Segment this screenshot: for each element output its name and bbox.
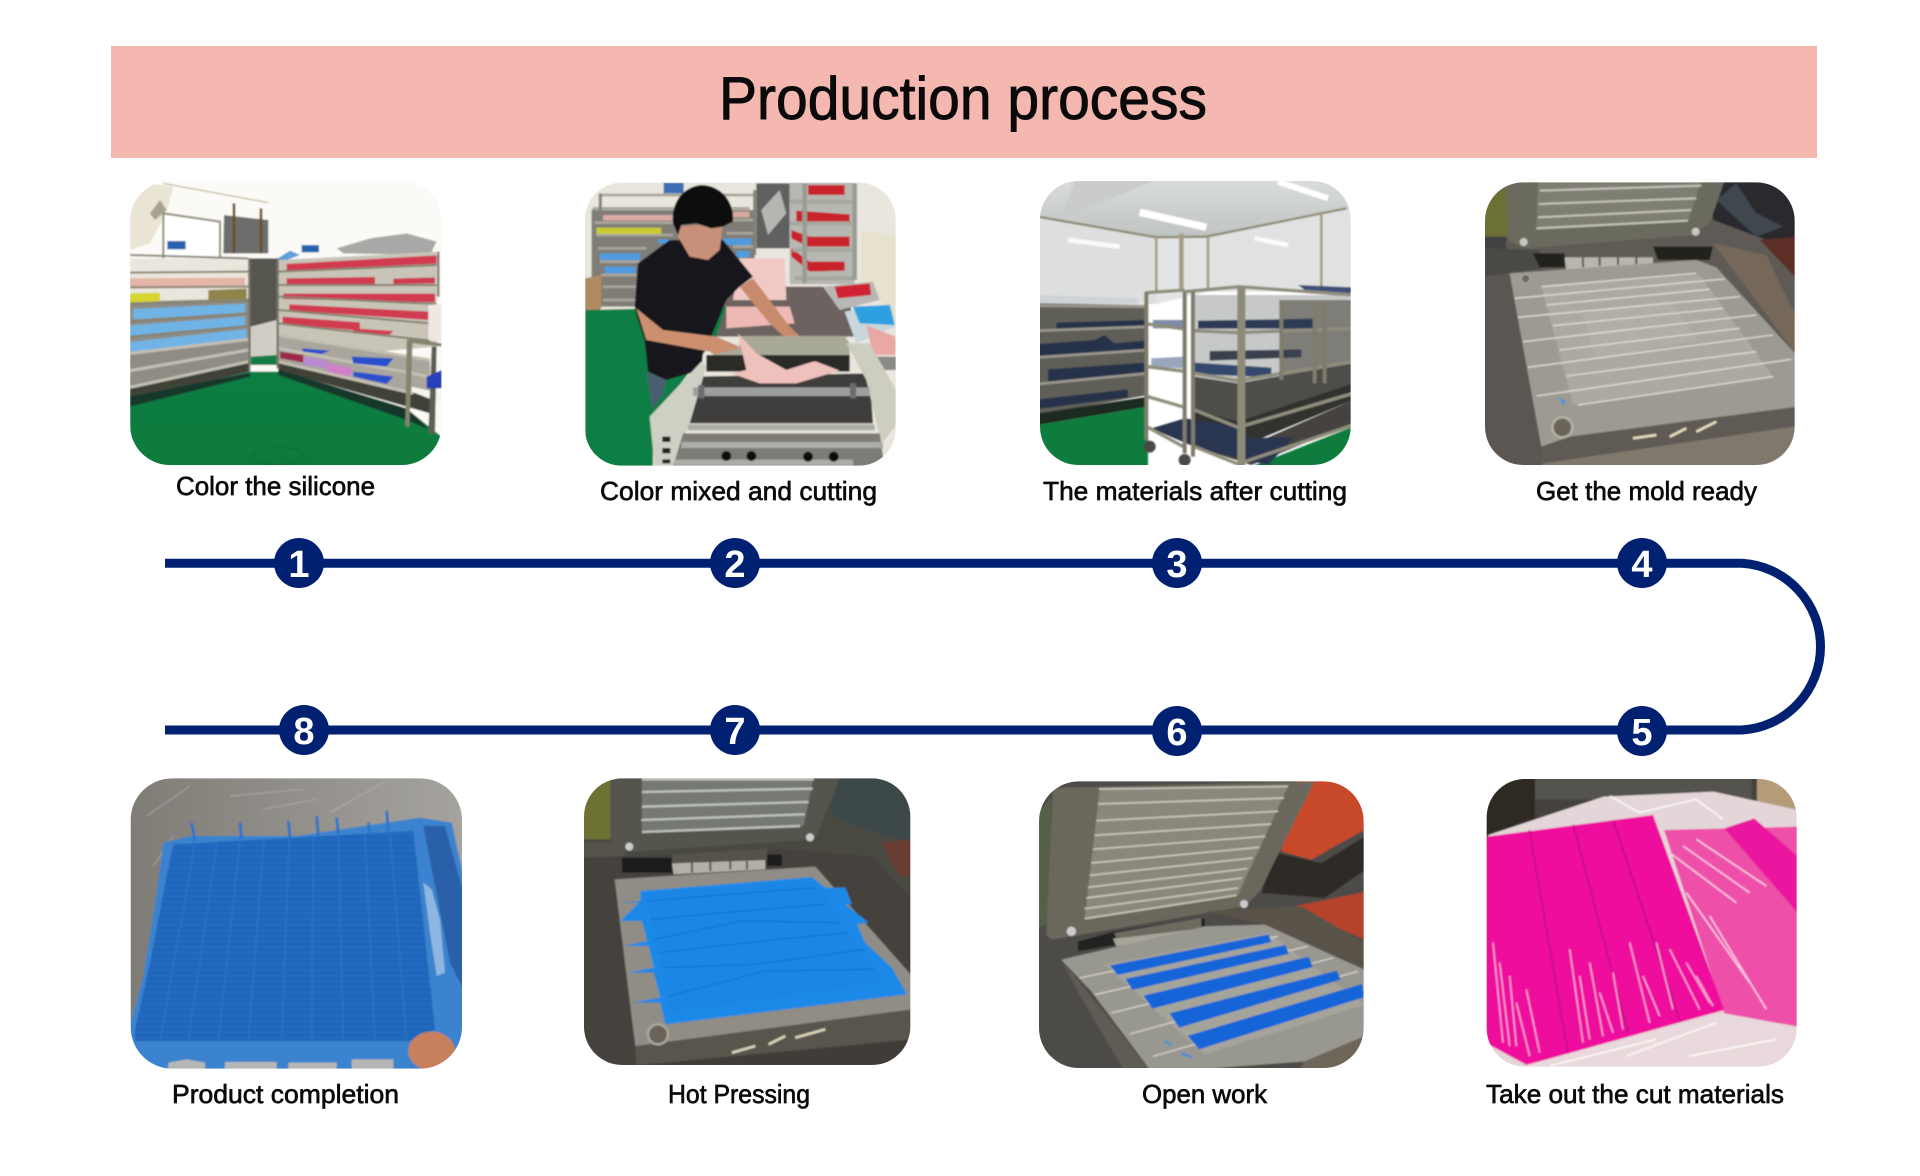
step 1 marker: [274, 538, 324, 588]
photo 8: finished blue silicone sheet: [130, 776, 463, 1070]
caption 1: Color the silicone: [176, 471, 375, 501]
timeline path: [165, 563, 1820, 730]
caption 8: Product completion: [172, 1079, 399, 1109]
caption 4: Get the mold ready: [1536, 476, 1757, 506]
step 5 marker: 5: [1631, 712, 1653, 754]
step 3 marker: [1152, 538, 1202, 588]
step 1 marker: 1: [288, 544, 310, 586]
title banner: [111, 46, 1817, 158]
step 2 marker: [710, 538, 760, 588]
step 5 marker: [1617, 706, 1667, 756]
step 4 marker: 4: [1631, 544, 1653, 586]
caption 2: Color mixed and cutting: [600, 476, 877, 506]
caption 7: Hot Pressing: [668, 1079, 810, 1109]
photo 4: empty mold: [1483, 180, 1798, 467]
step 8 marker: 8: [293, 711, 315, 753]
step 4 marker: [1617, 538, 1667, 588]
title: Production process: [719, 65, 1207, 132]
photo 7: hot pressing with blue silicone: [582, 776, 912, 1066]
caption 5: Take out the cut materials: [1486, 1079, 1784, 1109]
photo 3: materials on steel racks: [1038, 180, 1353, 467]
step 3 marker: 3: [1166, 544, 1188, 586]
caption 6: Open work: [1142, 1079, 1268, 1109]
photo 1: silicone storage shelves: [130, 180, 442, 467]
photo 6: open mold with blue strips: [1038, 778, 1368, 1071]
caption 3: The materials after cutting: [1043, 476, 1347, 506]
photo 2: worker at cutting machine: [583, 180, 898, 467]
step 6 marker: 6: [1166, 712, 1188, 754]
step 2 marker: 2: [724, 544, 746, 586]
step 6 marker: [1152, 706, 1202, 756]
step 7 marker: [710, 705, 760, 755]
step 7 marker: 7: [724, 711, 746, 753]
photo 5: magenta cut materials in plastic: [1483, 776, 1798, 1069]
step 8 marker: [279, 705, 329, 755]
